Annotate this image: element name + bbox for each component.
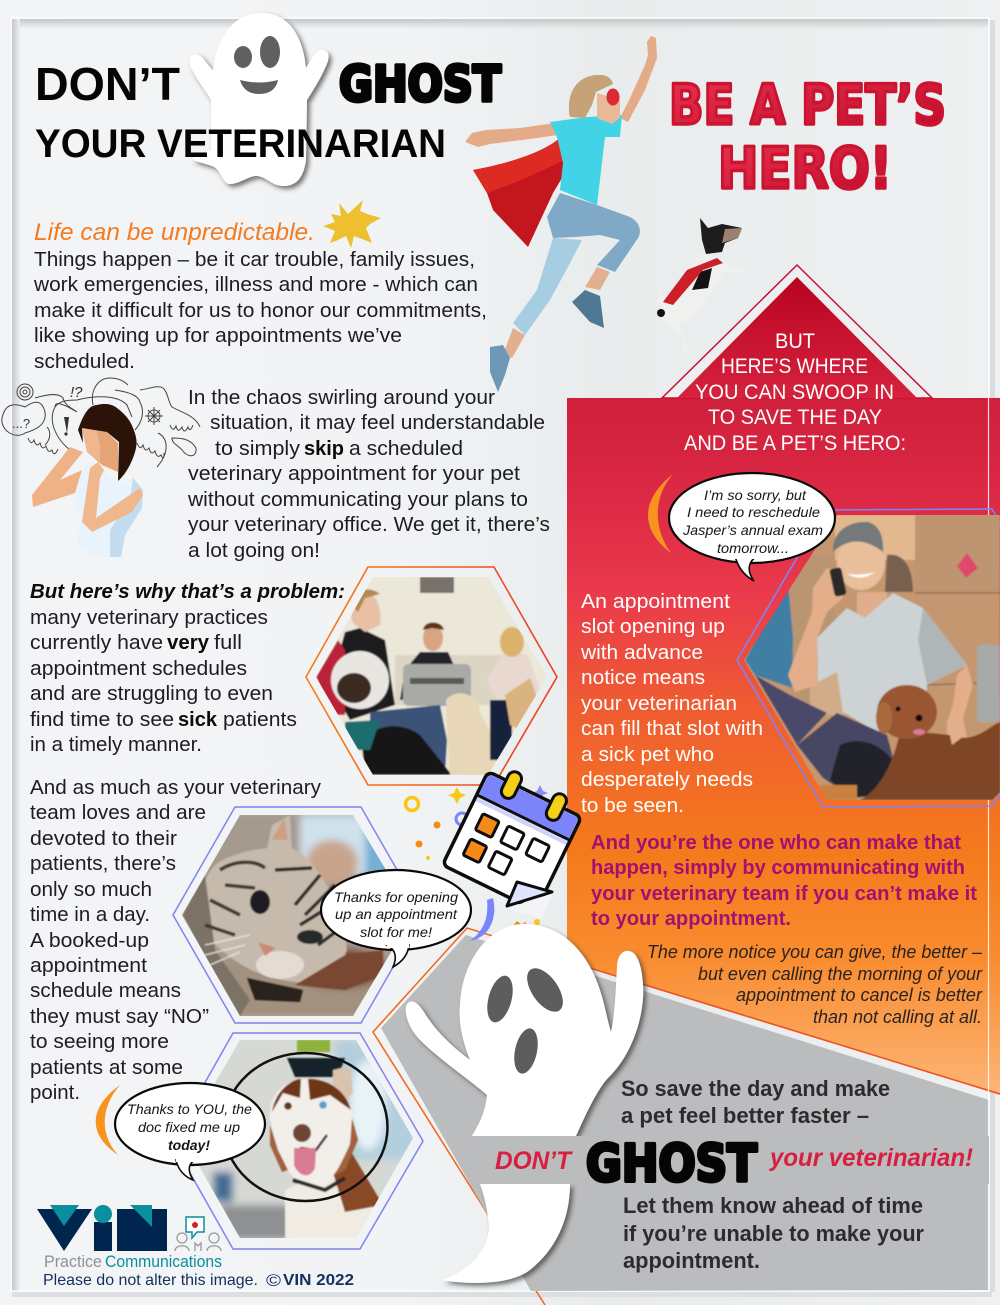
heading: don't ghost your veterinarian banner — [495, 1135, 973, 1194]
icon: stressed woman on phone with doodles: ...? — [12, 416, 30, 431]
title: don't ghost your veterinarian — [35, 13, 501, 186]
heading: be a pet's hero: HERO! — [718, 136, 892, 202]
logo: VIN practice communications: Practice — [44, 1252, 102, 1271]
text: in the chaos: a lot going on! — [188, 539, 320, 562]
text: why that's a problem: very — [167, 631, 210, 654]
text: so save the day — [621, 1076, 890, 1128]
logo: VIN practice communications: Communications — [105, 1252, 222, 1271]
text: in the chaos: In the chaos swirling around your — [188, 386, 495, 409]
text: heading in triangle: HERE’S WHERE — [721, 355, 868, 378]
callout: cat's speech bubble: up an appointment — [335, 906, 458, 922]
text: the more notice italic: The more notice you can give, the better – — [647, 942, 983, 962]
text: and as much as: patients at some — [30, 1056, 183, 1079]
text: why that's a problem: and are struggling to even — [30, 682, 273, 705]
callout: woman's speech bubble: I’m so sorry, but — [704, 487, 807, 503]
callout: husky's speech bubble — [96, 1083, 265, 1180]
text: and as much as: devoted to their — [30, 827, 177, 850]
text: an appointment slot: An appointment — [581, 590, 730, 613]
photo: jack russell dog with cape — [657, 218, 744, 356]
logo: VIN practice communications — [37, 1205, 354, 1290]
text: life can be unpredictable — [33, 219, 487, 373]
text: an appointment slot: a sick pet who — [581, 743, 714, 766]
text: purple communicating message: your veterinary team if you can’t make it — [591, 882, 977, 905]
text: why that's a problem: appointment schedules — [30, 657, 247, 680]
text: why that's a problem: in a timely manner. — [30, 733, 202, 756]
text: life can be unpredictable: Things happen – be it car trouble, family issues, — [34, 248, 475, 271]
icon: screaming ghost — [406, 924, 643, 1283]
heading: be a pet's hero — [669, 73, 946, 202]
text: in the chaos: your veterinary office. We get it, there’s — [188, 513, 550, 536]
text: and as much as: And as much as your veterinary — [30, 776, 322, 799]
text: the more notice italic: than not calling at all. — [813, 1007, 982, 1027]
heading: don't ghost your veterinarian banner: DON’T — [495, 1147, 574, 1175]
text: in the chaos: a scheduled — [349, 437, 463, 460]
text: in the chaos: situation, it may feel understandable — [210, 411, 545, 434]
text: the more notice italic — [647, 942, 983, 1027]
photo: woman on phone with dog hexagon — [737, 509, 1000, 807]
text: in the chaos — [187, 386, 550, 562]
text: heading in triangle: YOU CAN SWOOP IN — [695, 381, 894, 404]
text: heading in triangle: TO SAVE THE DAY — [708, 406, 882, 429]
text: let them know: if you’re unable to make your — [623, 1221, 924, 1246]
text: why that's a problem: currently have — [30, 631, 163, 654]
text: purple communicating message: happen, simply by communicating with — [591, 856, 965, 879]
text: the more notice italic: appointment to cancel is better — [736, 985, 983, 1005]
photo: husky with cone hexagon — [172, 1033, 423, 1249]
photo: girl in red cape flying — [465, 36, 657, 392]
heading: don't ghost your veterinarian banner: GHOST — [586, 1135, 757, 1194]
text: and as much as: only so much — [30, 878, 152, 901]
text: life can be unpredictable: scheduled. — [34, 350, 135, 373]
text: heading in triangle: AND BE A PET’S HERO: — [684, 432, 906, 455]
text: an appointment slot — [580, 590, 763, 817]
orange hexagon outline behind gray panel — [373, 928, 1000, 1305]
icon: calendar with confetti — [406, 761, 587, 941]
title: don't ghost your veterinarian: DON’T — [35, 58, 180, 110]
callout: woman's speech bubble — [648, 473, 835, 581]
photo: waiting room hexagon — [306, 567, 557, 785]
text: why that's a problem: sick — [178, 708, 218, 731]
panel: gray — [381, 935, 989, 1291]
callout: cat's speech bubble — [321, 870, 471, 967]
logo: VIN practice communications: Please do not alter this image. — [43, 1272, 258, 1289]
icon: stressed woman on phone with doodles — [2, 378, 200, 557]
text: in the chaos: to simply — [215, 437, 301, 460]
text: why that's a problem: patients — [223, 708, 297, 731]
callout: cat's speech bubble: Thanks for opening — [334, 889, 458, 905]
text: purple communicating message: And you’re the one who can make that — [591, 831, 961, 854]
text: why that's a problem — [30, 580, 345, 756]
text: heading in triangle: BUT — [775, 330, 815, 353]
text: so save the day: a pet feel better faster – — [621, 1103, 869, 1128]
text: purple communicating message — [591, 831, 977, 930]
text: and as much as: patients, there’s — [30, 852, 176, 875]
callout: woman's speech bubble: tomorrow... — [717, 540, 789, 556]
logo: VIN practice communications: VIN 2022 — [283, 1272, 354, 1289]
text: and as much as: team loves and are — [30, 801, 206, 824]
heading: don't ghost your veterinarian banner: your veterinarian! — [768, 1144, 973, 1172]
callout: cat's speech bubble: slot for me! — [360, 924, 432, 940]
callout: husky's speech bubble: Thanks to YOU, the — [127, 1101, 252, 1117]
text: why that's a problem: find time to see — [30, 708, 174, 731]
icon: smiling ghost — [190, 13, 329, 186]
heading: be a pet's hero: BE A PET’S — [669, 73, 946, 137]
icon: stressed woman on phone with doodles: !? — [70, 384, 83, 401]
text: and as much as: A booked-up — [30, 929, 149, 952]
text: heading in triangle — [684, 330, 906, 455]
text: life can be unpredictable: make it difficult for us to honor our commitments, — [34, 299, 487, 322]
text: an appointment slot: slot opening up — [581, 615, 725, 638]
text: an appointment slot: can fill that slot with — [581, 717, 763, 740]
text: why that's a problem: many veterinary practices — [30, 606, 268, 629]
text: let them know: Let them know ahead of time — [623, 1193, 923, 1218]
band: gray strip across ghost — [472, 1136, 989, 1184]
text: and as much as: time in a day. — [30, 903, 150, 926]
text: an appointment slot: notice means — [581, 666, 705, 689]
text: and as much as: schedule means — [30, 979, 181, 1002]
text: and as much as: appointment — [30, 954, 147, 977]
panel: red to orange gradient — [567, 398, 1000, 1094]
title: don't ghost your veterinarian: GHOST — [339, 56, 501, 113]
text: so save the day: So save the day and make — [621, 1076, 890, 1101]
frame line over coloured panel — [988, 398, 990, 1291]
text: and as much as: they must say “NO” — [30, 1005, 209, 1028]
text: and as much as — [30, 776, 322, 1104]
text: life can be unpredictable: work emergencies, illness and more - which can — [33, 273, 478, 296]
orange diagonal line — [567, 961, 1000, 1094]
callout: husky's speech bubble: doc fixed me up — [138, 1119, 240, 1135]
text: why that's a problem: full — [214, 631, 242, 654]
text: an appointment slot: to be seen. — [581, 794, 684, 817]
text: the more notice italic: but even calling the morning of your — [698, 964, 983, 984]
text: life can be unpredictable: Life can be unpredictable. — [34, 219, 315, 246]
callout: woman's speech bubble: Jasper’s annual exam — [682, 522, 823, 538]
text: an appointment slot: with advance — [580, 641, 703, 664]
text: in the chaos: without communicating your plans to — [187, 488, 528, 511]
text: purple communicating message: to your appointment. — [591, 907, 791, 930]
text: let them know: appointment. — [623, 1248, 760, 1273]
icon: autumn maple leaf — [323, 200, 381, 248]
text: let them know — [623, 1193, 924, 1273]
text: an appointment slot: your veterinarian — [581, 692, 737, 715]
text: and as much as: to seeing more — [30, 1030, 169, 1053]
panel: roof triangle — [662, 265, 932, 398]
text: in the chaos: veterinary appointment for your pet — [188, 462, 520, 485]
text: an appointment slot: desperately needs — [581, 768, 753, 791]
logo: VIN practice communications: © — [266, 1271, 282, 1290]
text: life can be unpredictable: like showing up for appointments we’ve — [34, 324, 402, 347]
text: and as much as: point. — [30, 1081, 80, 1104]
text: why that's a problem: But here’s why that’s a problem: — [30, 580, 345, 603]
title: don't ghost your veterinarian: YOUR VETERINARIAN — [35, 122, 446, 166]
callout: woman's speech bubble: I need to reschedule — [687, 504, 820, 520]
callout: husky's speech bubble: today! — [168, 1137, 210, 1153]
text: in the chaos: skip — [304, 437, 344, 460]
photo: cat hexagon — [173, 807, 423, 1023]
